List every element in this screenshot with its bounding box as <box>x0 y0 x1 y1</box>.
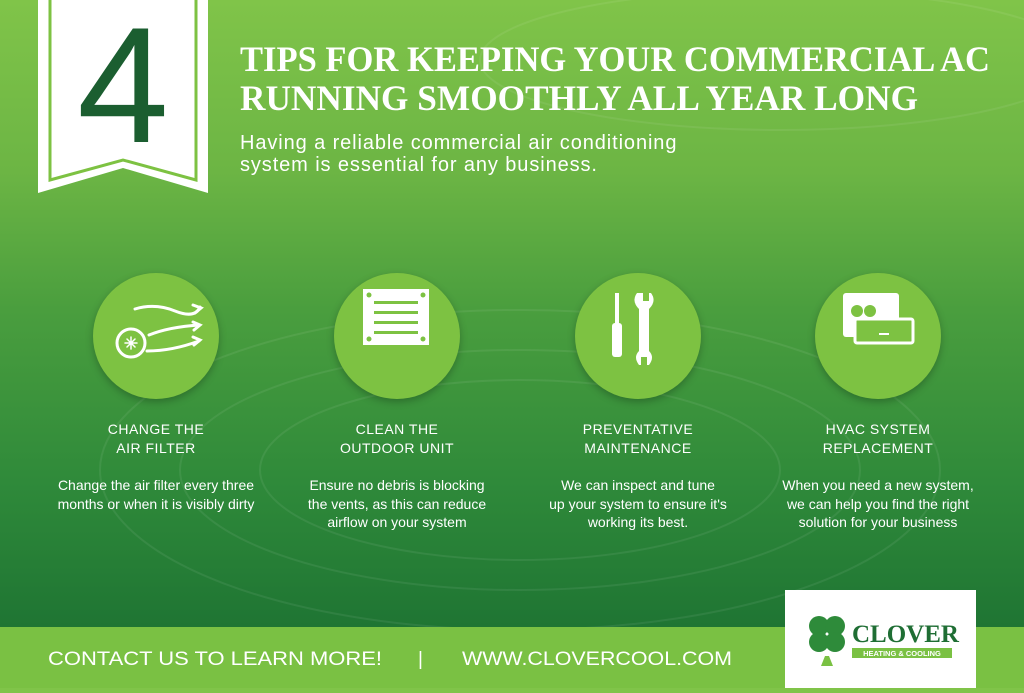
footer bar <box>0 627 1024 688</box>
text: Ensure no debris is blocking <box>309 477 485 493</box>
logo box: CLOVER <box>852 621 960 648</box>
banner with number 4 <box>38 0 208 193</box>
logo box <box>785 590 976 688</box>
text <box>549 477 727 530</box>
heading: OUTDOOR UNIT <box>340 440 454 456</box>
text <box>308 477 486 530</box>
footer text: | <box>418 649 423 670</box>
footer text: WWW.CLOVERCOOL.COM <box>462 649 732 670</box>
text: We can inspect and tune <box>561 477 715 493</box>
text: we can help you find the right <box>787 496 969 512</box>
subtitle: system is essential for any business. <box>240 154 598 176</box>
subtitle: Having a reliable commercial air conditioning <box>240 132 677 154</box>
tip 1 <box>58 273 254 512</box>
heading: AIR FILTER <box>116 440 196 456</box>
heading: REPLACEMENT <box>823 440 933 456</box>
text: When you need a new system, <box>782 477 974 493</box>
text <box>782 477 974 530</box>
icon: ac unit <box>815 273 941 399</box>
text: solution for your business <box>799 514 957 530</box>
text <box>58 477 254 512</box>
footer text <box>48 649 732 670</box>
heading <box>823 421 933 456</box>
icon: tools <box>575 273 701 399</box>
icon: vent <box>334 273 460 399</box>
text: up your system to ensure it's <box>549 496 727 512</box>
heading: CLEAN THE <box>356 421 438 437</box>
heading: CHANGE THE <box>108 421 204 437</box>
title: RUNNING SMOOTHLY ALL YEAR LONG <box>240 78 918 118</box>
icon: air filter <box>93 273 219 399</box>
tip 4 <box>782 273 974 530</box>
heading <box>108 421 204 456</box>
subtitle <box>240 132 677 176</box>
tip 3 <box>549 273 727 530</box>
title <box>240 39 990 118</box>
text: months or when it is visibly dirty <box>58 496 254 512</box>
heading: MAINTENANCE <box>584 440 692 456</box>
logo box: HEATING & COOLING <box>863 649 941 658</box>
text: Change the air filter every three <box>58 477 254 493</box>
text: airflow on your system <box>327 514 467 530</box>
tip 2 <box>308 273 486 530</box>
footer text: CONTACT US TO LEARN MORE! <box>48 649 382 670</box>
heading <box>583 421 693 456</box>
title: TIPS FOR KEEPING YOUR COMMERCIAL AC <box>240 39 990 79</box>
heading: HVAC SYSTEM <box>826 421 930 437</box>
heading: PREVENTATIVE <box>583 421 693 437</box>
heading <box>340 421 454 456</box>
text: the vents, as this can reduce <box>308 496 486 512</box>
text: working its best. <box>588 514 688 530</box>
